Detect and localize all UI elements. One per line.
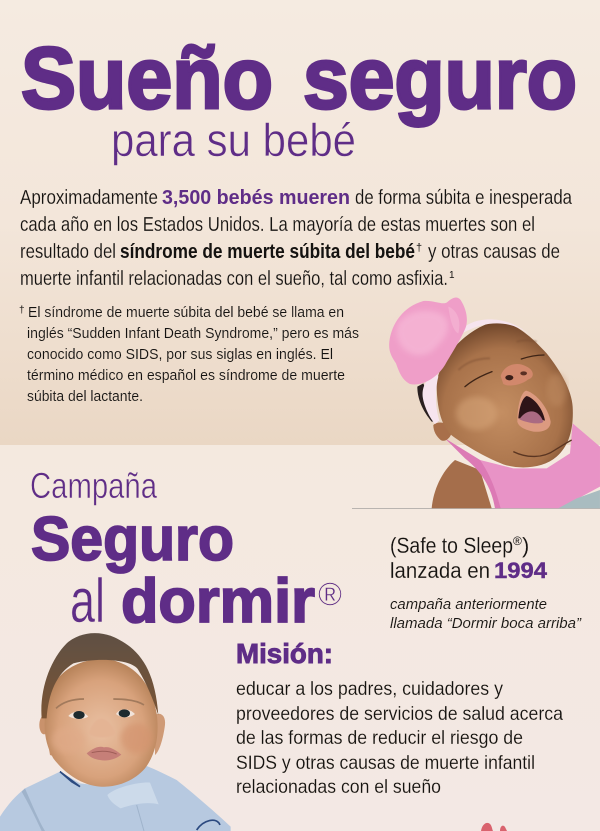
background: bottom section	[0, 445, 600, 831]
footnote: término médico en español es síndrome de muerte	[27, 367, 345, 384]
hair behind band	[417, 383, 438, 422]
campaign launch note: ®	[513, 534, 522, 548]
chin crease	[513, 440, 572, 456]
former campaign name: campaña anteriormente	[390, 596, 547, 613]
intro paragraph: resultado del	[20, 241, 116, 263]
pink flower	[389, 297, 467, 384]
mouth	[517, 391, 551, 432]
footnote: conocido como SIDS, por sus siglas en inglés. El	[27, 346, 333, 363]
nose	[501, 364, 533, 386]
intro paragraph: Aproximadamente	[20, 187, 158, 209]
campaign launch note: 1994	[494, 558, 548, 583]
photo: smiling baby	[0, 633, 231, 831]
intro paragraph: †	[416, 242, 422, 254]
ear	[433, 423, 452, 441]
footnote: súbita del lactante.	[27, 388, 143, 405]
campaign launch note: lanzada en	[390, 558, 490, 583]
former campaign name	[390, 596, 582, 632]
mission text: proveedores de servicios de salud acerca	[236, 703, 563, 725]
cheek highlight	[456, 397, 497, 430]
footnote: El síndrome de muerte súbita del bebé se llama en	[28, 304, 344, 321]
heading: Misión: Misión:	[236, 638, 333, 669]
footnote: inglés “Sudden Infant Death Syndrome,” pero es más	[27, 325, 359, 342]
main title: Sueño	[21, 30, 273, 127]
intro paragraph: 1	[449, 270, 455, 281]
section title: al dormir: ®	[318, 576, 342, 612]
former campaign name: llamada “Dormir boca arriba”	[390, 615, 582, 632]
closed eyes	[465, 355, 544, 387]
hair	[41, 633, 158, 718]
intro paragraph: muerte infantil relacionadas con el sueño, tal como asfixia.	[20, 268, 448, 290]
main title	[21, 30, 577, 127]
mission text: relacionadas con el sueño	[236, 776, 441, 798]
subtitle: para su bebé	[111, 114, 356, 166]
section title: al dormir: dormir	[121, 567, 315, 636]
intro paragraph: síndrome de muerte súbita del bebé	[120, 241, 415, 263]
mission text	[236, 678, 563, 798]
cheeks	[52, 727, 85, 753]
blue outfit	[0, 766, 231, 831]
outfit logo	[197, 820, 220, 830]
intro paragraph: y otras causas de	[428, 241, 560, 263]
main title: seguro	[303, 30, 577, 127]
campaign launch note: (Safe to Sleep	[390, 533, 513, 558]
eyebrows	[56, 699, 144, 708]
footnote	[19, 304, 359, 405]
nose	[89, 718, 116, 737]
photo: yawning baby	[389, 297, 600, 508]
mouth	[87, 747, 121, 760]
mission text: educar a los padres, cuidadores y	[236, 678, 503, 700]
collar	[107, 783, 159, 808]
intro paragraph: 3,500 bebés mueren	[162, 187, 350, 209]
mission text: SIDS y otras causas de muerte infantil	[236, 752, 535, 774]
campaign launch note	[390, 533, 548, 583]
eyes	[68, 712, 88, 719]
section title: Campaña: Campaña	[30, 465, 158, 506]
intro paragraph	[20, 187, 573, 290]
ears	[39, 716, 49, 734]
eyebrows	[458, 340, 537, 370]
mission text: de las formas de reducir el riesgo de	[236, 727, 523, 749]
divider line under photo	[352, 508, 600, 509]
section title: Seguro: Seguro	[31, 505, 234, 574]
pink top	[445, 423, 600, 508]
campaign launch note: )	[522, 533, 529, 558]
icon: partial red fingers at bottom edge	[481, 823, 507, 831]
head	[45, 658, 158, 787]
background: top section	[0, 0, 600, 445]
shoulder	[432, 460, 492, 508]
footnote: †	[19, 305, 25, 316]
head	[437, 322, 573, 467]
section title: al dormir: al	[70, 567, 105, 636]
white headband	[423, 319, 530, 424]
clothing print	[558, 490, 600, 508]
